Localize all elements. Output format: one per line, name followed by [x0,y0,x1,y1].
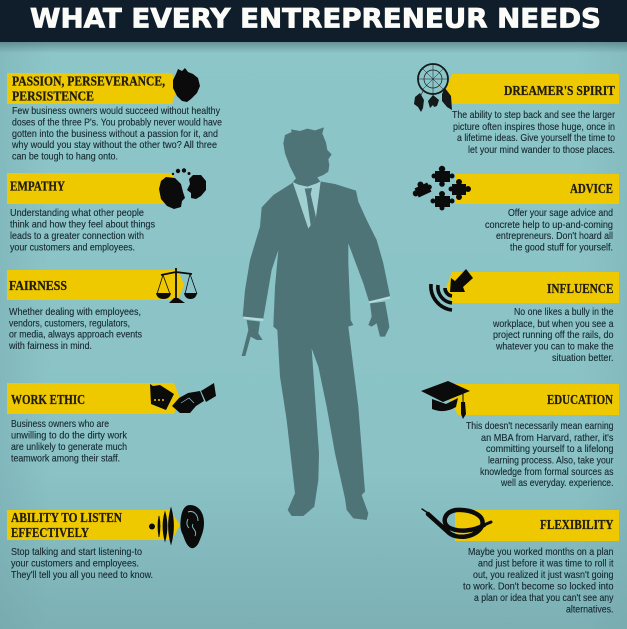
body text: your customers and employees. [10,242,135,254]
body text: vendors, customers, regulators, [9,318,130,330]
title banner [0,0,627,42]
heading [12,74,165,104]
icon: puzzle pieces [409,166,471,210]
icon: heart [173,68,200,102]
right hand [368,302,389,337]
body text: Few business owners would succeed without healthy [12,106,221,117]
body text: alternatives. [566,604,614,616]
body text: can be tough to hang onto. [12,152,118,162]
body text: to work. Don't become so locked into [463,582,614,592]
heading: EFFECTIVELY [11,525,89,540]
banner [455,510,619,541]
panel: dreamer's spirit [414,64,619,156]
body text: leads to a greater connection with [10,231,144,242]
heading: ADVICE [570,181,613,196]
title: WHAT EVERY ENTREPRENEUR NEEDS [30,4,601,34]
body text: gotten into the business without a passion for it, and [12,129,218,140]
panel: flexibility [422,509,619,616]
body text: think and how they feel about things [10,220,155,230]
body text: Understanding what other people [10,208,144,219]
body text [10,208,155,254]
banner [446,272,619,303]
body text [11,547,153,581]
icon: sound waves [149,508,174,544]
icon: balance scale [156,268,197,303]
left hand [242,320,263,356]
icon: knotted pencil [422,509,491,537]
body text: situation better. [552,353,614,364]
heading: EDUCATION [547,392,613,407]
body text [452,110,616,156]
banner [7,270,184,300]
body text: your customers and employees. [11,558,139,570]
icon: handshake [150,383,216,413]
banner [7,73,177,104]
body text: committing yourself to a lifelong [486,444,614,455]
heading: FLEXIBILITY [540,517,614,532]
heading [11,510,122,540]
body text: Stop talking and start listening-to [11,547,142,558]
central silhouette of businessman [242,127,390,520]
body text: unwilling to do the dirty work [11,430,128,442]
body text: with fairness in mind. [8,341,92,352]
tie [305,188,316,225]
body text [485,208,613,254]
heading: WORK ETHIC [11,392,85,407]
body text [466,421,614,489]
body text: concrete help to up-and-coming [485,220,613,231]
body text: Business owners who are [11,419,109,430]
panel: ability to listen effectively [7,505,204,581]
body text: the good stuff for yourself. [510,242,613,254]
body text: or media, always approach events [9,330,142,340]
body text: No one likes a bully in the [514,307,614,318]
icon: graduation cap [421,381,470,419]
panel: advice [409,166,619,254]
body text [11,106,222,162]
body text: are unlikely to generate much [11,442,127,453]
heading: PERSISTENCE [12,88,94,104]
banner [455,174,619,204]
heading: INFLUENCE [547,281,614,296]
panel: work ethic [7,383,216,464]
body text: project running off the rails, do [493,330,614,341]
banner [7,173,178,204]
body text: Offer your sage advice and [508,208,613,219]
heading: PASSION, PERSEVERANCE, [12,74,165,88]
panel: influence [431,269,619,364]
banner [450,384,619,415]
icon: two heads with dots [159,168,206,209]
panel: empathy [7,168,206,254]
body text: why would you stay without the other two? All three [11,140,217,151]
panel: fairness [7,268,197,352]
body text [8,307,142,352]
body text: doses of the three P's. You probably never would have [12,118,222,128]
body text [463,547,614,616]
body text: entrepreneurs. Don't hoard all [496,231,613,242]
panel: passion, perseverance, persistence [7,68,222,162]
body text: teamwork among their staff. [11,454,120,464]
shirt [293,181,321,229]
body text: an MBA from Harvard, rather, it's [481,433,614,444]
icon: ear [180,505,204,548]
panel: education [421,381,619,489]
icon: arrow and signal waves [431,269,473,310]
icon: dreamcatcher [414,64,452,112]
banner [7,510,180,540]
body text [11,419,128,464]
banner [446,74,619,104]
heading: FAIRNESS [9,278,67,293]
body text: They'll tell you all you need to know. [11,570,153,581]
heading: EMPATHY [10,178,65,194]
body text: Whether dealing with employees, [9,307,141,318]
body text [492,307,614,364]
heading: ABILITY TO LISTEN [11,510,122,525]
banner [7,383,180,414]
shirt cuffs [243,298,390,320]
